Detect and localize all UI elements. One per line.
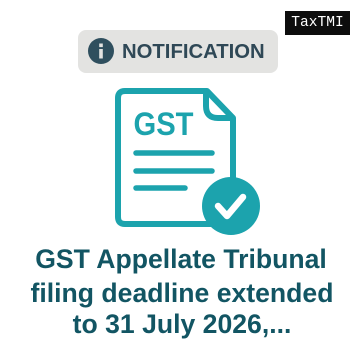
document text lines bbox=[136, 153, 212, 188]
headline bbox=[30, 244, 333, 339]
headline: filing deadline extended bbox=[31, 278, 333, 308]
icon: GST document with check mark bbox=[115, 88, 260, 235]
logo: TaxTMI: TaxTMI bbox=[291, 15, 344, 31]
check badge bbox=[202, 177, 260, 235]
logo: TaxTMI bbox=[285, 11, 350, 35]
notification badge bbox=[78, 30, 278, 73]
document GST text: GST bbox=[134, 106, 194, 142]
document outline bbox=[118, 91, 233, 224]
icon: info bbox=[88, 38, 114, 64]
badge label: NOTIFICATION bbox=[122, 41, 265, 63]
headline: GST Appellate Tribunal bbox=[35, 244, 327, 274]
headline: to 31 July 2026,... bbox=[73, 309, 291, 339]
